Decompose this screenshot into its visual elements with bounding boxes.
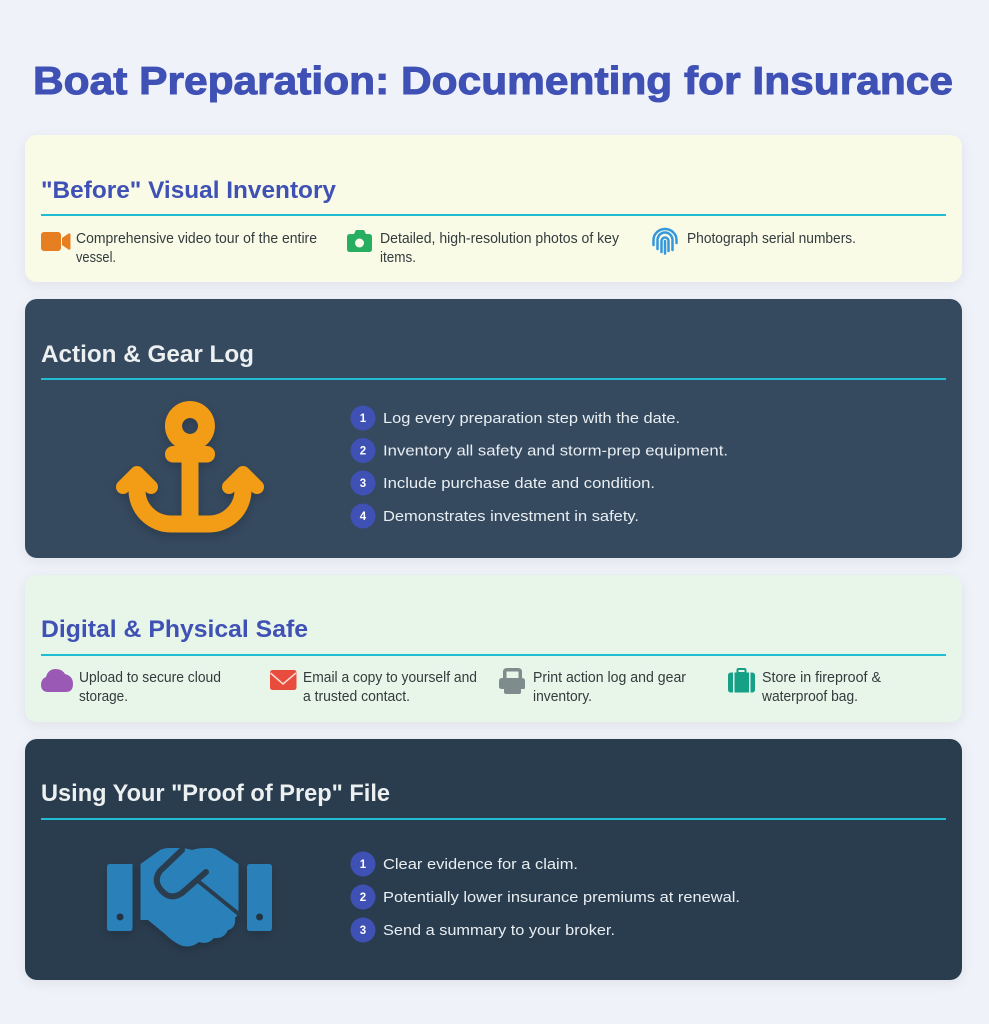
list: action steps: 1 bbox=[360, 413, 367, 425]
list: proof of prep uses: 3 bbox=[360, 925, 366, 937]
text: cloud storage: Upload to secure cloud bbox=[79, 670, 221, 686]
title: Boat Preparation: Documenting for Insurance bbox=[33, 60, 953, 103]
text: email: a trusted contact. bbox=[303, 689, 410, 705]
list: proof of prep uses: 2 bbox=[360, 892, 366, 904]
list: action steps: 4 bbox=[360, 511, 367, 523]
icon: envelope bbox=[270, 670, 296, 690]
text: cloud storage: storage. bbox=[79, 689, 128, 705]
list: proof of prep uses: 1 bbox=[360, 859, 367, 871]
text: email: Email a copy to yourself and bbox=[303, 670, 477, 686]
heading: action and gear log: Action & Gear Log bbox=[41, 341, 254, 368]
heading: digital and physical safe: Digital & Physical Safe bbox=[41, 616, 308, 643]
icon: fingerprint bbox=[654, 229, 676, 254]
panel: before visual inventory bbox=[25, 135, 962, 282]
list: action steps: Log every preparation step with the date. bbox=[383, 410, 680, 427]
list: proof of prep uses: Send a summary to your broker. bbox=[383, 922, 615, 939]
text: print: inventory. bbox=[533, 689, 592, 705]
text: store: Store in fireproof & bbox=[762, 670, 881, 686]
icon: suitcase bbox=[728, 668, 755, 692]
text: video tour: Comprehensive video tour of the entire bbox=[76, 231, 317, 247]
list: action steps: 3 bbox=[360, 478, 366, 490]
icon: video camera bbox=[41, 232, 70, 251]
list: action steps: Include purchase date and condition. bbox=[383, 475, 655, 492]
text: video tour: vessel. bbox=[76, 250, 116, 266]
heading: before visual inventory: "Before" Visual Inventory bbox=[41, 177, 337, 204]
list: action steps bbox=[350, 406, 728, 528]
panel: action and gear log bbox=[25, 299, 962, 558]
text: serial numbers: Photograph serial numbers. bbox=[687, 231, 856, 247]
panel: digital and physical safe bbox=[25, 575, 962, 722]
icon: handshake bbox=[107, 848, 272, 946]
icon: camera bbox=[347, 230, 372, 252]
list: proof of prep uses: Potentially lower insurance premiums at renewal. bbox=[383, 889, 740, 906]
text: print: Print action log and gear bbox=[533, 670, 686, 686]
list: action steps: Inventory all safety and storm-prep equipment. bbox=[383, 442, 728, 460]
list: action steps: Demonstrates investment in safety. bbox=[383, 508, 639, 525]
heading: using proof of prep file: Using Your "Proof of Prep" File bbox=[41, 780, 390, 807]
icon: anchor bbox=[123, 401, 257, 527]
panel: using your proof of prep file bbox=[25, 739, 962, 980]
icon: cloud bbox=[41, 669, 73, 692]
list: proof of prep uses: Clear evidence for a claim. bbox=[383, 856, 578, 873]
icon: printer bbox=[499, 668, 525, 694]
text: photos: Detailed, high-resolution photos of key bbox=[380, 231, 620, 247]
list: action steps: 2 bbox=[360, 446, 366, 458]
list: proof of prep uses bbox=[350, 852, 740, 942]
text: store: waterproof bag. bbox=[761, 689, 858, 705]
text: photos: items. bbox=[380, 250, 416, 266]
